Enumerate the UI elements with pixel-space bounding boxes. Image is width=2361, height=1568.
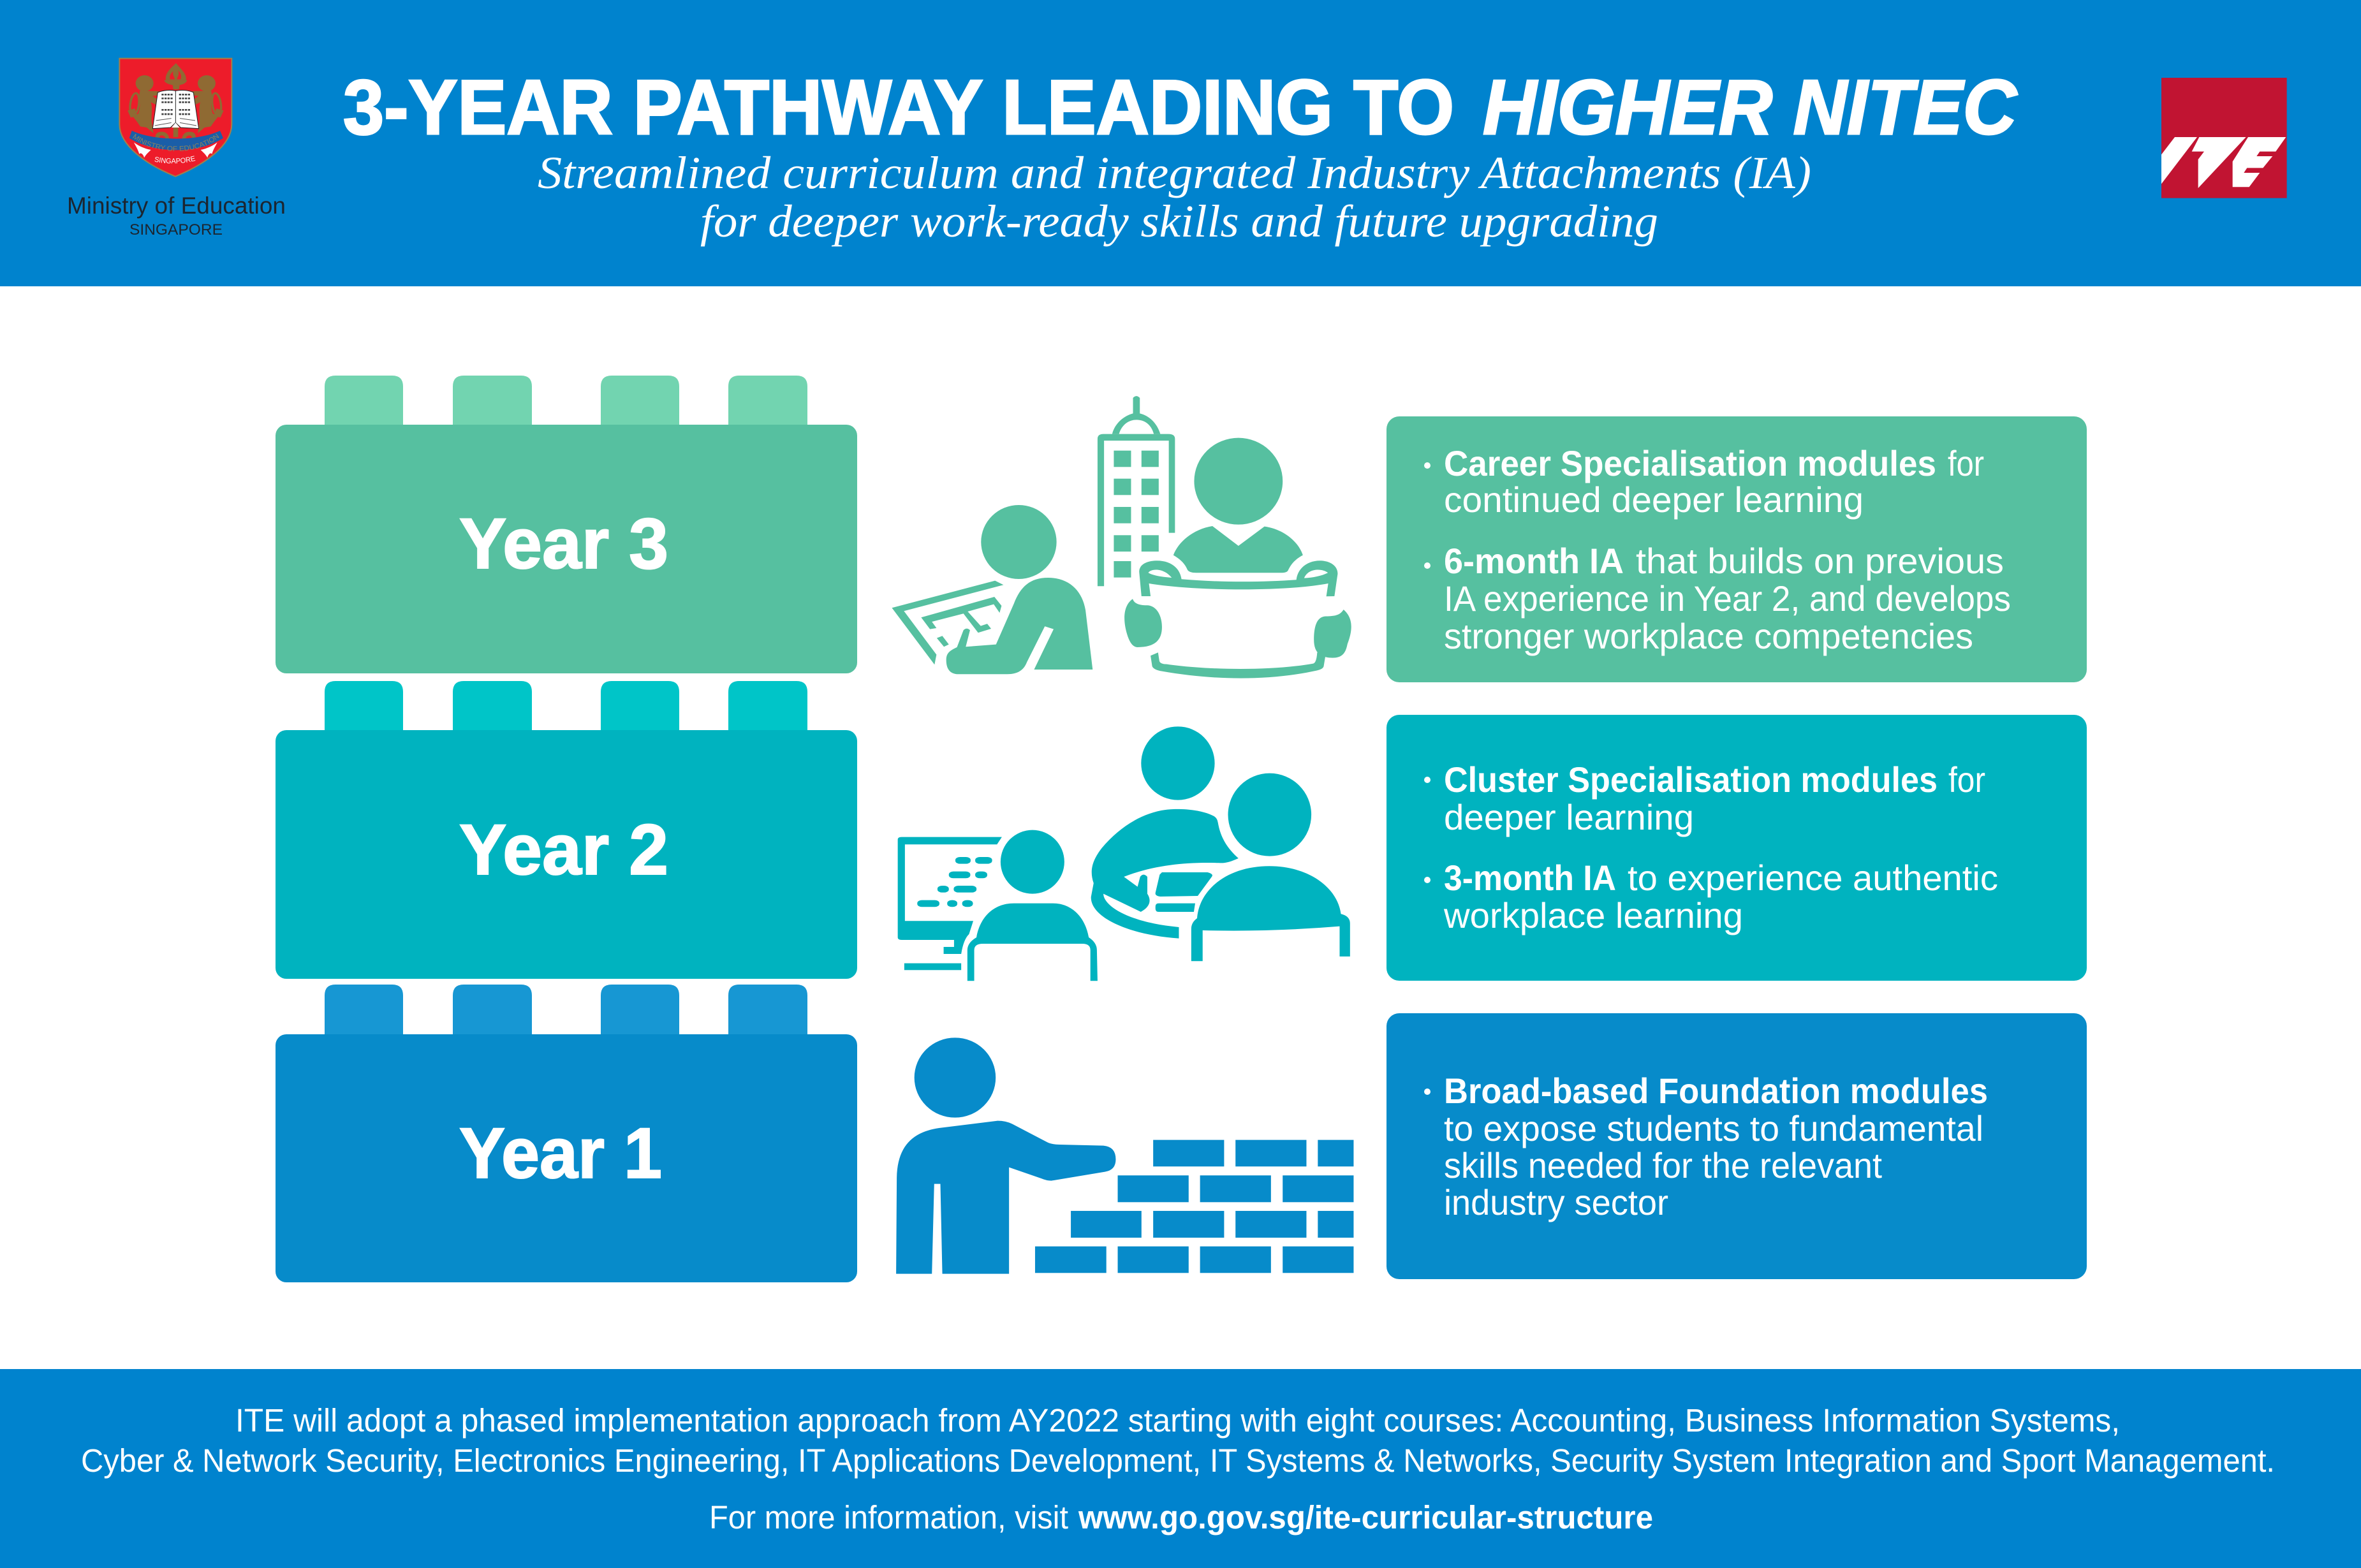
panel: Year 2 details: workplace learning [1443,895,1743,935]
panel: Year 1 details: skills needed for the relevant [1444,1145,1882,1185]
footer panel [0,1369,2361,1568]
panel: Year 3 details: 6-month IA [1444,541,1624,581]
title: HIGHER NITEC [1483,64,2018,150]
icon: Year 3 people with plans and office tower [892,396,1351,678]
panel: Year 3 details: stronger workplace competencies [1444,616,1973,656]
brick: Year 1 [276,985,857,1282]
panel: Year 1 details: to expose students to fundamental [1444,1108,1983,1148]
footer text: more information link: www.go.gov.sg/ite-curricular-structure [1078,1499,1653,1535]
panel: Year 2 details [1386,715,2087,981]
footer text: phased implementation: ITE will adopt a phased implementation approach from AY2022 starting with eight courses: Accounting, Business Information Systems, [235,1402,2120,1439]
Ministry of Education label: Ministry of Education [67,193,286,219]
label: Year 1: Year 1 [459,1113,662,1193]
subtitle [538,147,1811,247]
brick: Year 3 [276,376,857,673]
title: 3-YEAR PATHWAY LEADING TO [343,64,1454,150]
label: Year 2: Year 2 [459,810,668,890]
Singapore label: SINGAPORE [129,221,223,238]
icon: Year 2 student at computer and discussion [898,726,1350,981]
icon: Ministry of Education crest: SINGAPORE [154,156,195,163]
icon: ITE logo [2161,78,2287,198]
panel: Year 3 details: IA experience in Year 2, and develops [1444,578,2011,619]
panel: Year 1 details: industry sector [1444,1182,1668,1222]
icon: Ministry of Education crest [119,57,232,177]
footer text: more information link [709,1499,1653,1535]
panel: Year 2 details: for [1948,759,1985,800]
footer text: phased implementation [81,1402,2275,1479]
header panel [0,0,2361,286]
panel: Year 1 details [1386,1013,2087,1279]
panel: Year 2 details: deeper learning [1444,797,1694,837]
panel: Year 2 details: to experience authentic [1628,858,1998,898]
panel: Year 2 details: 3-month IA [1444,858,1616,898]
panel: Year 3 details: that builds on previous [1636,541,2004,581]
panel: Year 2 details: Cluster Specialisation modules [1444,759,1938,800]
footer text: phased implementation: Cyber & Network Security, Electronics Engineering, IT Applications Development, IT Systems & Networks, Security System Integration and Sport Management. [81,1442,2275,1479]
panel: Year 3 details [1386,416,2087,682]
icon: Year 1 person building brick wall [896,1037,1353,1274]
subtitle: Streamlined curriculum and integrated Industry Attachments (IA) [538,147,1811,198]
panel: Year 3 details: Career Specialisation modules [1444,443,1936,483]
panel: Year 3 details: continued deeper learning [1444,480,1864,520]
icon: Ministry of Education crest: MINISTRY OF EDUCATION [133,134,219,152]
panel: Year 1 details: Broad-based Foundation modules [1444,1071,1988,1111]
brick: Year 2 [276,681,857,979]
footer text: more information link: For more information, visit [709,1499,1068,1535]
subtitle: for deeper work-ready skills and future upgrading [700,196,1658,247]
panel: Year 3 details: for [1948,443,1984,483]
label: Year 3: Year 3 [459,504,668,583]
